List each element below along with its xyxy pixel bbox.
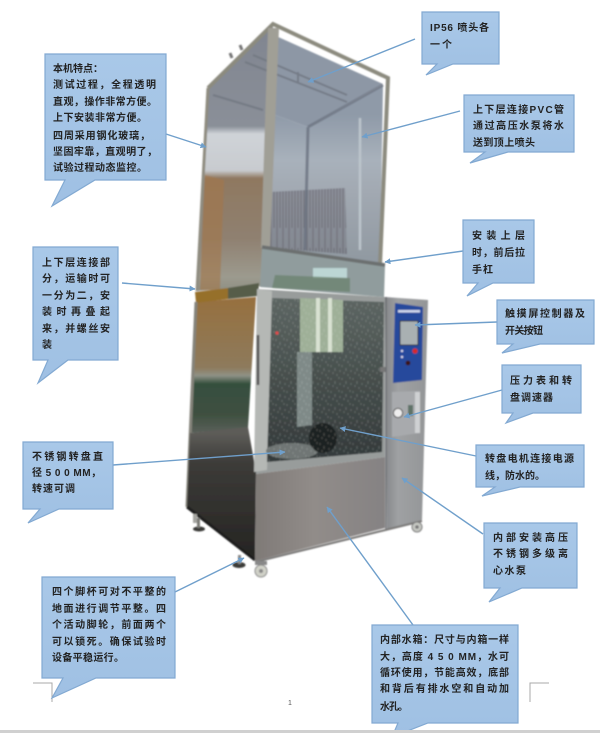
- callout: pump: 心水泵: [493, 564, 526, 577]
- front corner post: [261, 28, 279, 248]
- callout: joint section: 装时再叠起: [42, 305, 110, 318]
- arrows: [113, 39, 502, 625]
- callout: nozzle: IP56 喷头各: [430, 21, 489, 34]
- upper left glass panel: [197, 24, 273, 291]
- callout: turntable: 转速可调: [32, 482, 75, 495]
- callout: joint section: 来，并螺丝安: [42, 322, 110, 335]
- left junction band: [195, 288, 228, 303]
- upper frame: [208, 24, 388, 265]
- callout: PVC pipe: [464, 95, 574, 163]
- callout: touch screen: [497, 300, 594, 353]
- arrow: motor cable: [340, 428, 476, 456]
- callout: machine features: 坚固牢靠，直观明了，: [53, 145, 157, 158]
- PVC pipe: [359, 118, 361, 250]
- lower left frame: [187, 302, 196, 507]
- speed knob: [408, 405, 413, 416]
- rain streaks upper: [267, 188, 347, 254]
- callout: touch screen: 触摸屏控制器及: [505, 307, 585, 320]
- callout: feet and casters: 设备平稳运行。: [52, 651, 124, 664]
- callout: pump: 内部安装高压: [493, 531, 568, 544]
- callout: machine features: 测试过程，全程透明: [53, 78, 156, 91]
- callout: machine features: 直观，操作非常方便。: [53, 95, 157, 108]
- callout: joint section: 一分为二，安: [42, 289, 110, 302]
- callout: pump: 不锈钢多级离: [493, 547, 568, 560]
- callout: machine features: 本机特点：: [53, 62, 103, 75]
- callout: joint section: 装: [42, 338, 52, 351]
- callout: PVC pipe: 通过高压水泵将水: [473, 119, 564, 132]
- arrow: PVC pipe: [362, 111, 460, 137]
- touch screen: [400, 321, 418, 345]
- callout: feet and casters: 四个脚杯可对不平整的: [52, 585, 166, 598]
- callout: water tank: 大，高度 4 5 0 MM，水可: [380, 650, 509, 663]
- callout: gauge and speed controller: 盘调速器: [510, 391, 553, 404]
- callout: joint section: 分，运输时可: [42, 272, 110, 285]
- page number: 1: [288, 700, 292, 707]
- arrow: nozzle: [308, 39, 415, 82]
- callout: gauge and speed controller: 压力表和转: [510, 374, 572, 387]
- callout: motor cable: 线，防水的。: [485, 469, 545, 482]
- callout: water tank: [372, 625, 518, 733]
- callout: touch screen: 开关按钮: [505, 324, 543, 337]
- right equipment column: [385, 297, 428, 529]
- door handle: [380, 367, 389, 372]
- inner frame: [305, 85, 383, 250]
- callout: water tank: 水孔。: [380, 700, 408, 713]
- callout: machine features: 四周采用钢化玻璃，: [53, 129, 150, 142]
- callout: machine features: 上下安装非常方便。: [53, 111, 147, 124]
- callout: feet and casters: 个活动脚轮，前面两个: [52, 618, 166, 631]
- callout: machine features: [45, 54, 166, 206]
- callout: handle: 时，前后拉: [472, 246, 525, 259]
- glass below handle: [260, 247, 385, 297]
- arrow: gauge: [404, 390, 502, 417]
- red indicator: [275, 331, 279, 335]
- callout: handle: 安装上层: [472, 229, 525, 242]
- touch control panel: [393, 303, 423, 383]
- callout: feet and casters: 可以锁死。确保试验时: [52, 635, 166, 648]
- gauge panel: [392, 391, 420, 437]
- callout: water tank: 内部水箱：尺寸与内箱一样: [380, 633, 509, 646]
- lower front frame: [256, 289, 385, 474]
- arrow: handle: [385, 251, 463, 262]
- buttons: [412, 348, 418, 354]
- green outdoor reflection: [300, 298, 343, 352]
- arrow: pump: [402, 478, 483, 534]
- callout: PVC pipe: 送到顶上喷头: [473, 136, 535, 149]
- arrow: water tank: [327, 507, 413, 625]
- callout: PVC pipe: 上下层连接PVC管: [473, 103, 564, 116]
- arrow: turntable: [113, 452, 285, 465]
- callout: pump: [484, 523, 577, 602]
- feet and casters: [193, 514, 422, 577]
- door hinge: [257, 335, 259, 385]
- upper front wall: [262, 85, 383, 265]
- callout: nozzle: 一个: [430, 39, 452, 51]
- base front panel: [255, 457, 385, 561]
- machine: water spray test chamber: [187, 24, 428, 577]
- arrow: feet: [175, 558, 244, 592]
- callout: motor cable: [476, 445, 584, 496]
- callout: handle: [463, 220, 534, 296]
- page corner marks: [33, 683, 549, 702]
- arrow: joint section: [122, 283, 195, 289]
- centre pillar reflection: [297, 352, 312, 427]
- callout: handle: 手杠: [472, 263, 493, 276]
- ceiling: [275, 36, 383, 127]
- callout: feet and casters: [42, 577, 175, 698]
- callout: turntable: 不锈钢转盘直: [32, 450, 103, 463]
- callout: joint section: 上下层连接部: [42, 256, 110, 269]
- pressure gauge: [393, 408, 403, 418]
- lower left glass: [190, 297, 256, 433]
- lower front glass: [267, 298, 384, 462]
- callout: joint section: [33, 247, 118, 383]
- handle bar: [262, 247, 385, 265]
- motor cable housing: [309, 423, 337, 453]
- callout: machine features: 试验过程动态监控。: [53, 161, 147, 174]
- callout: water tank: 和背后有排水空和自动加: [380, 682, 509, 695]
- orange reflection: [200, 175, 224, 290]
- callout: turntable: 径 5 0 0 MM，: [32, 466, 101, 479]
- turntable: [266, 443, 318, 459]
- callout: gauge and speed controller: [502, 365, 581, 423]
- callout: nozzle: [422, 12, 499, 75]
- arrow: features to glass: [166, 134, 206, 147]
- bottom page edge: [0, 730, 600, 733]
- callout: feet and casters: 地面进行调节平整。四: [52, 602, 166, 615]
- dark left lower panel: [187, 427, 256, 560]
- callout: motor cable: 转盘电机连接电源: [485, 452, 574, 465]
- callout: turntable: [23, 442, 113, 523]
- callout: water tank: 循环使用，节能高效，底部: [380, 666, 509, 679]
- arrow: touch screen: [415, 322, 497, 325]
